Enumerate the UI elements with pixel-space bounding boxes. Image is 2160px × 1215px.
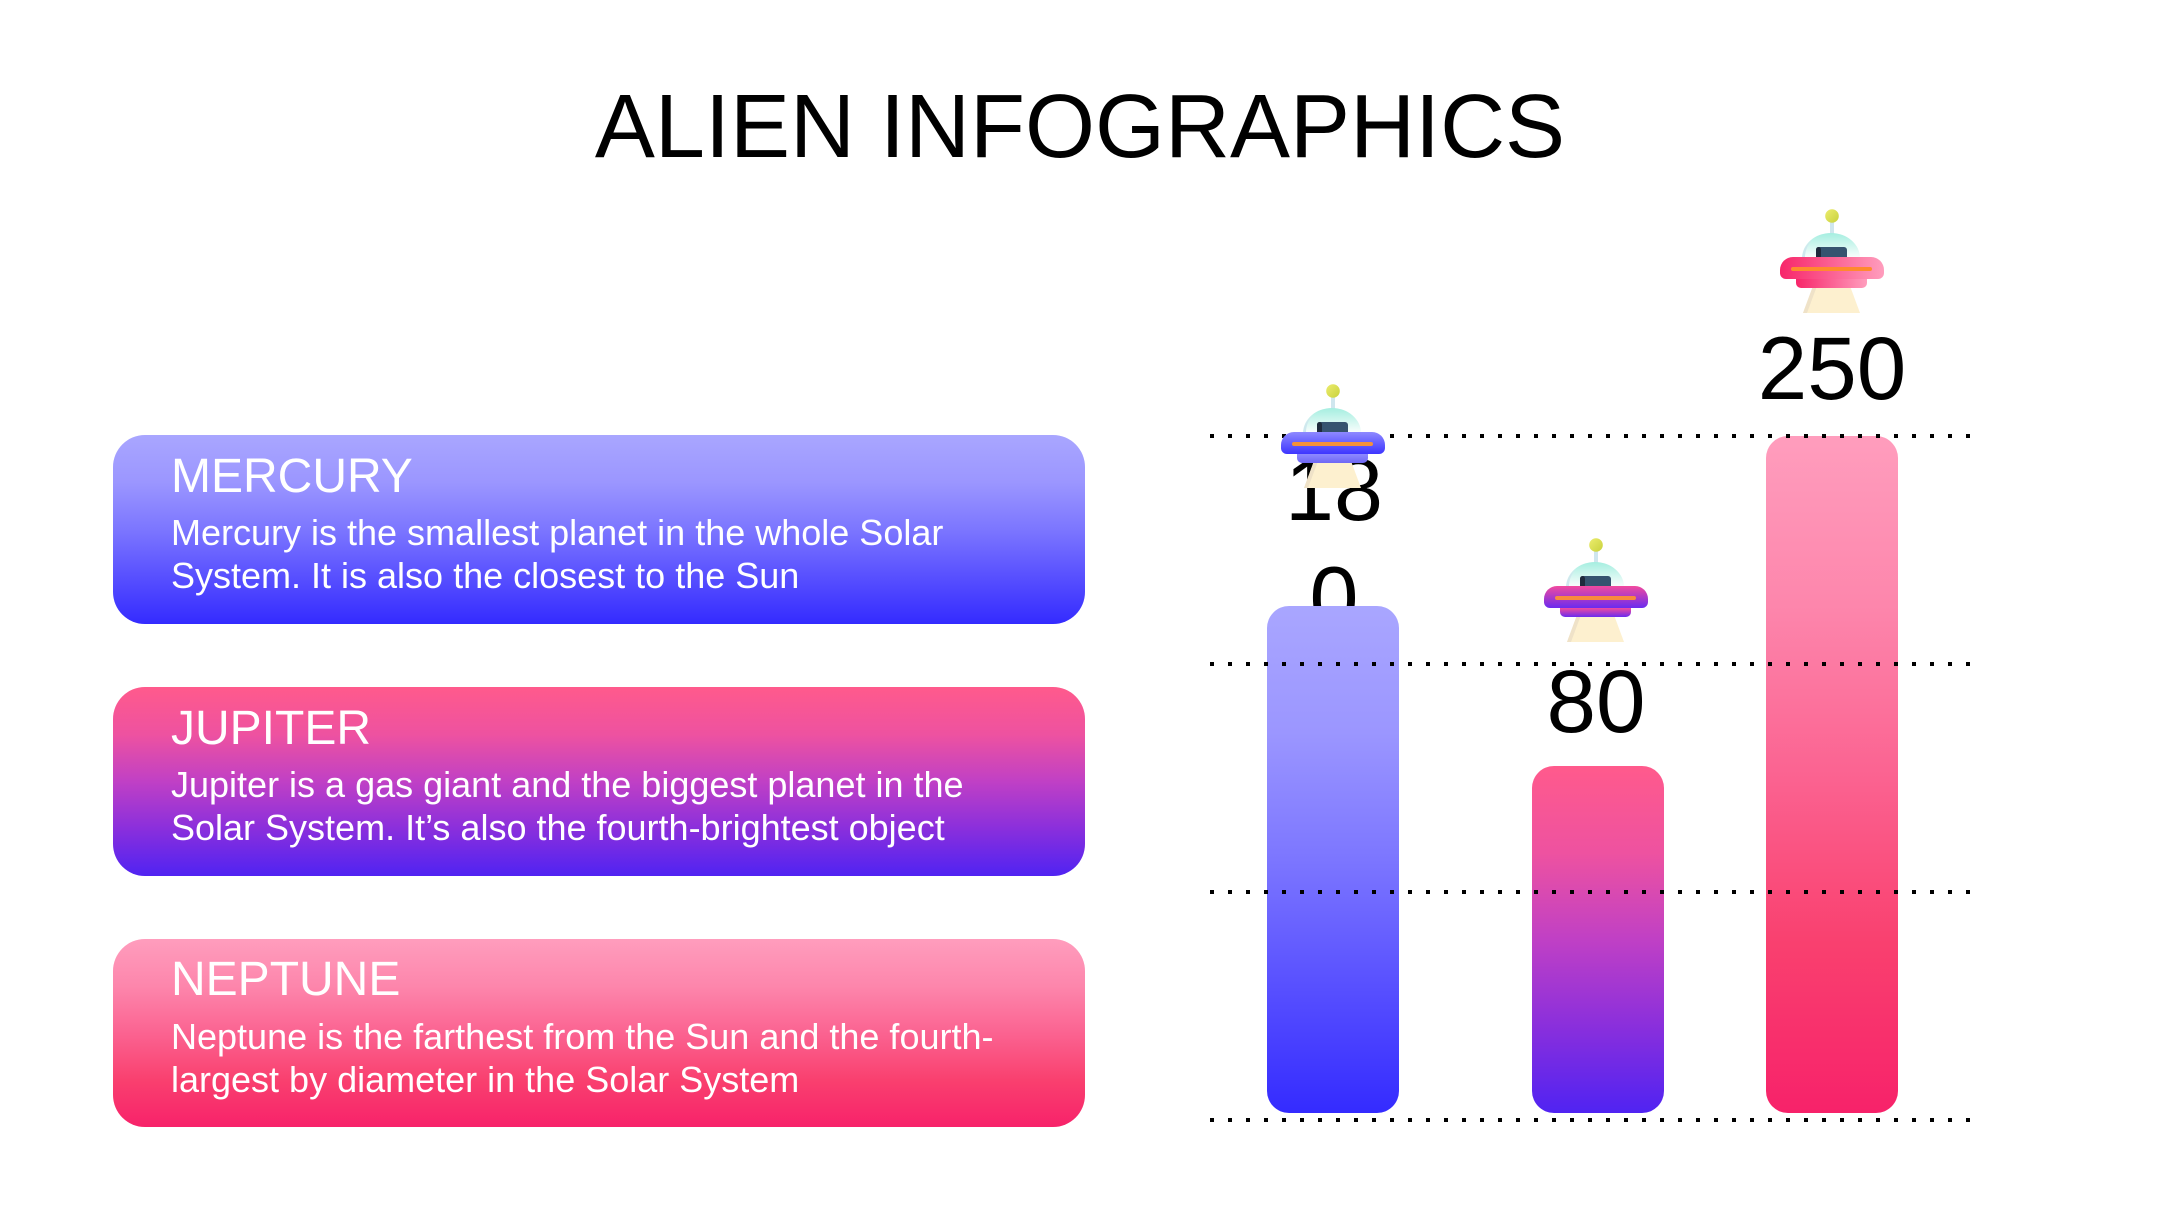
text: Mercury description: Mercury is the smallest planet in the whole Solar (171, 512, 943, 553)
text: Mercury description: System. It is also the closest to the Sun (171, 555, 799, 596)
panel: Jupiter card (113, 687, 1085, 876)
value label: 180: 0 (1310, 548, 1358, 647)
text: Jupiter description (171, 764, 964, 848)
heading: Neptune: NEPTUNE (171, 953, 400, 1006)
icon: UFO pink-purple (1544, 538, 1648, 642)
value label: 180: 18 (1285, 440, 1383, 539)
text: Jupiter description: Jupiter is a gas giant and the biggest planet in the (171, 764, 964, 805)
title: ALIEN INFOGRAPHICS (595, 77, 1565, 177)
panel: Mercury card (113, 435, 1085, 624)
heading: Jupiter: JUPITER (171, 702, 371, 754)
bar: Neptune 250 (1766, 436, 1898, 1113)
icon: UFO purple-blue (1281, 384, 1385, 488)
icon: UFO pink-red (1780, 209, 1884, 313)
bar: Mercury 180 (1267, 606, 1399, 1113)
panel: Neptune card (113, 938, 1085, 1127)
text: Jupiter description: Solar System. It’s also the fourth-brightest object (171, 807, 945, 848)
text: Neptune description (171, 1016, 993, 1100)
value label: 80: 80 (1546, 651, 1646, 751)
text: Neptune description: Neptune is the farthest from the Sun and the fourth- (171, 1016, 993, 1056)
heading: Mercury: MERCURY (171, 450, 413, 502)
value label: 250: 250 (1758, 318, 1906, 418)
bar: Jupiter 80 (1532, 766, 1664, 1113)
text: Mercury description (171, 512, 943, 596)
text: Neptune description: largest by diameter in the Solar System (171, 1058, 799, 1100)
